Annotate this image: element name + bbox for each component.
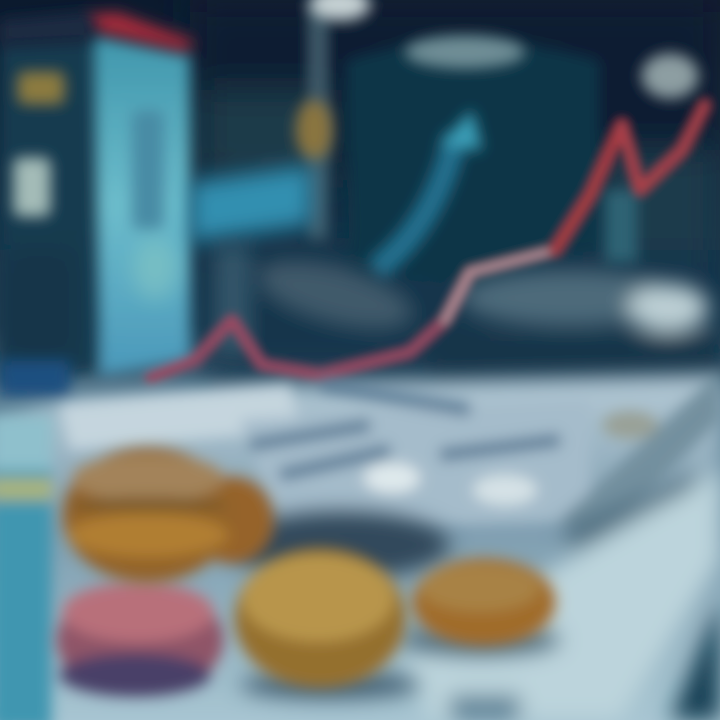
tower red roof xyxy=(85,12,192,52)
red trend line xyxy=(150,105,705,378)
tower side markings xyxy=(132,110,164,230)
white disc right xyxy=(628,284,708,332)
dark backdrop xyxy=(190,0,720,380)
cookie shadows xyxy=(230,511,560,699)
tower pale accent xyxy=(133,240,177,300)
discs behind chart xyxy=(250,247,720,375)
stacked golden cookies xyxy=(62,447,274,583)
cyan arrow xyxy=(375,110,482,270)
panel: central dark screen xyxy=(345,36,600,285)
paper white left xyxy=(60,385,300,450)
paper bright spot two xyxy=(473,475,537,505)
tower lower dark area xyxy=(5,250,75,360)
golden cookie right xyxy=(412,558,556,646)
yellow stripe xyxy=(0,478,52,500)
screen body xyxy=(345,40,600,285)
shadow bar xyxy=(560,470,700,550)
dark table corner xyxy=(670,600,720,720)
left cyan column xyxy=(0,415,52,720)
dark shelf xyxy=(430,335,720,375)
pale top xyxy=(0,415,52,470)
lamp glow xyxy=(310,0,370,20)
tower roof shadow xyxy=(0,12,95,45)
teal block xyxy=(605,190,637,262)
tower white window xyxy=(14,158,50,216)
panel: paper documents xyxy=(60,370,720,540)
panel: tower building xyxy=(0,12,192,385)
grey disc right xyxy=(460,270,680,326)
tower light side xyxy=(93,35,190,375)
blue left accent xyxy=(0,360,70,396)
table lower right xyxy=(400,470,720,720)
cyan horizontal band xyxy=(190,165,312,242)
lower band support xyxy=(215,245,251,355)
tower yellow window xyxy=(18,72,64,104)
screen top highlight xyxy=(405,36,525,68)
orange marker xyxy=(296,100,332,160)
paper bright spot one xyxy=(364,463,420,493)
paper tan spot xyxy=(602,411,658,439)
grey disc left xyxy=(250,247,420,343)
paper body xyxy=(240,400,590,530)
table surface xyxy=(0,375,720,720)
right pale blobs xyxy=(605,54,698,262)
chart dark stripes xyxy=(250,385,560,475)
bottom dark slot xyxy=(450,695,520,720)
right paper shade xyxy=(560,370,720,540)
tower dark face xyxy=(0,40,100,385)
pale table edge xyxy=(400,470,720,720)
golden cookie centre xyxy=(234,548,406,688)
pink cookie xyxy=(56,582,224,697)
pole xyxy=(308,0,328,240)
cyan strip xyxy=(0,420,52,720)
pole with lamp xyxy=(296,0,370,240)
pale blob top xyxy=(642,54,698,98)
